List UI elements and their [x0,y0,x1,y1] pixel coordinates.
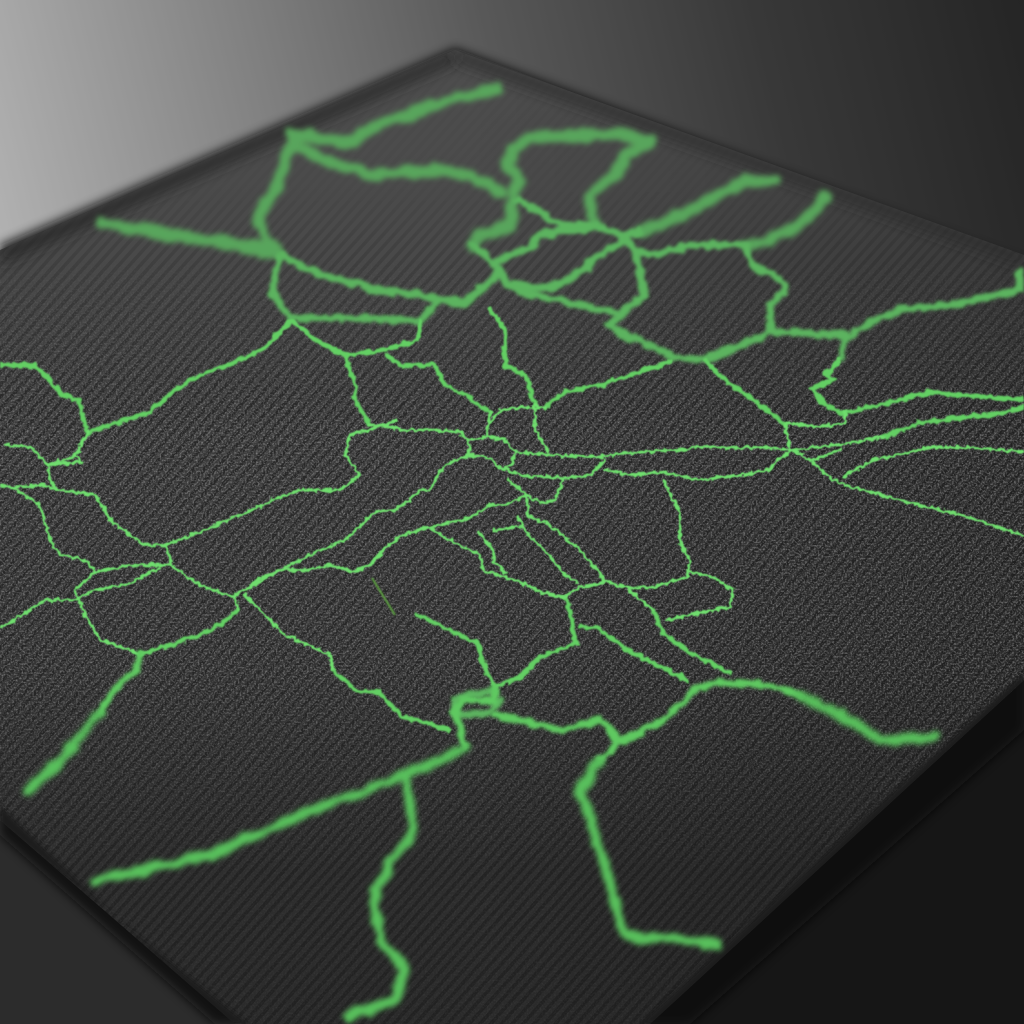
patch edge bottom left [0,805,248,1024]
patch edge top right [455,50,1024,265]
east tail [800,695,933,740]
junction loop [455,690,500,715]
table surface lower right [620,660,1024,1024]
top centre loop [472,133,652,245]
patch edge bottom right [640,672,1024,1024]
far right route [840,270,1021,360]
hub [370,425,487,440]
stitched routes: far, most blurred [100,88,826,255]
left upper [0,365,88,432]
patch edge top left [0,50,455,264]
top left routes [258,88,498,255]
right side shading [782,188,1024,740]
stitched routes: near foreground, soft and thick [100,655,800,760]
woven ribs [0,251,1024,1024]
left loop [5,432,88,465]
upper mesh centre [472,245,615,312]
lower mesh [495,597,577,687]
stitched routes: focal plane, sharp thin [1,405,1023,670]
thread grain [0,280,1024,1024]
upper mesh right [625,243,745,255]
stitched routes: near middle, slightly soft [0,310,1023,730]
right strong [883,407,1023,437]
lower left tail [100,655,140,712]
east bound [515,447,793,457]
south mesh [527,480,563,503]
right upper [705,360,785,425]
centre upper [292,320,370,425]
top right branches [640,180,775,232]
south tail [348,780,412,1017]
dark green stray stitch [372,578,395,615]
centre junction [455,687,495,745]
left crossing [165,545,235,598]
centre long diagonal [245,455,470,590]
stitched routes: upper middle [272,200,1021,715]
lower left tail end [30,712,100,788]
table surface lower left [0,790,270,1024]
lower right run [495,682,800,742]
upper mesh left [280,255,500,302]
long route south west [95,748,465,880]
south east tail [580,760,718,945]
